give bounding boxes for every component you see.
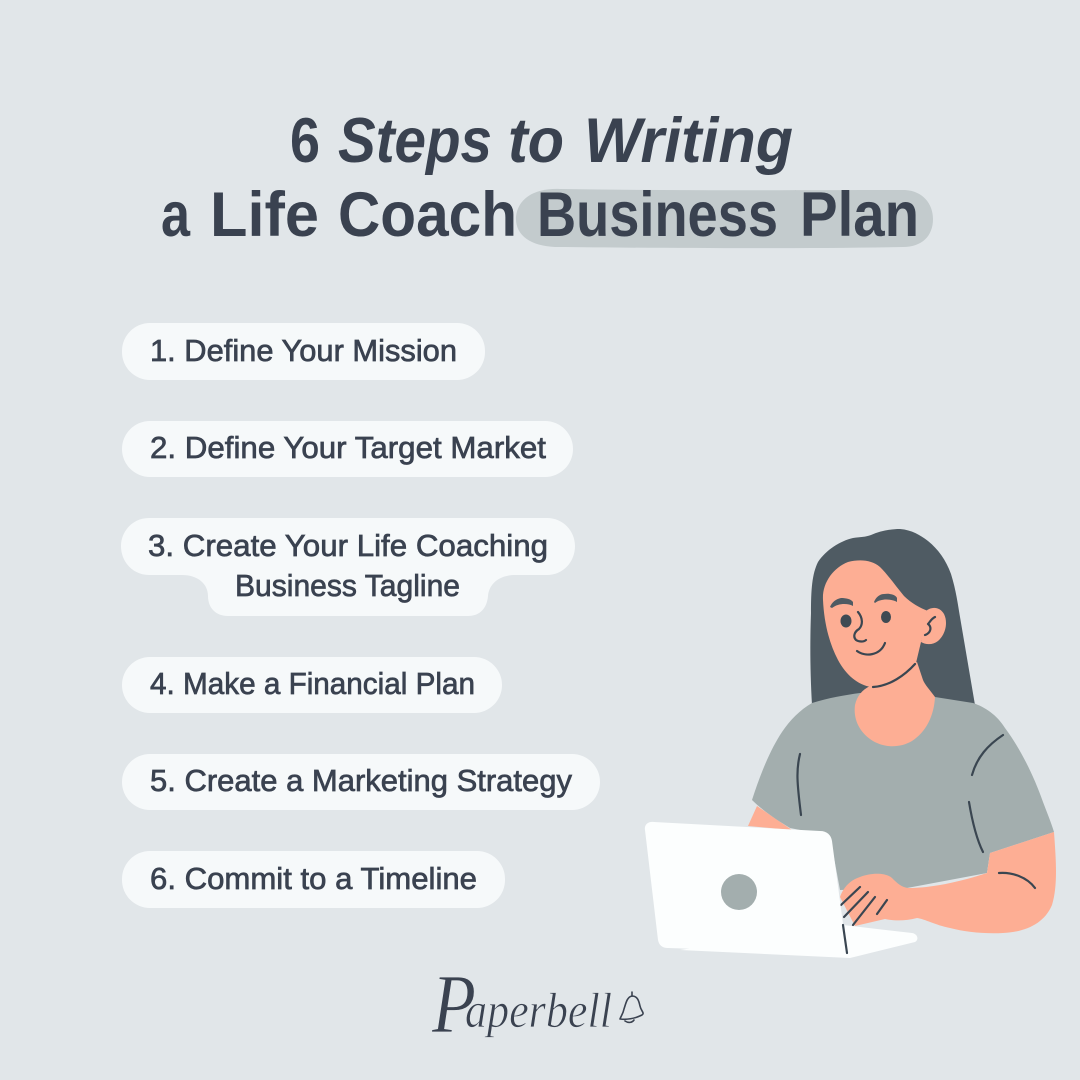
step 3: 3. Create Your Life Coaching — [148, 528, 548, 563]
hair — [810, 529, 975, 705]
title: Steps — [338, 106, 492, 176]
title: Life — [210, 180, 319, 250]
arm and finger lines — [841, 873, 1035, 925]
step 1: 1. Define Your Mission — [150, 333, 457, 368]
step 5 — [122, 754, 600, 810]
ear — [921, 608, 946, 644]
step 6 — [122, 851, 505, 908]
step 2 — [122, 421, 573, 477]
shirt — [752, 693, 1054, 890]
step 6: 6. Commit to a Timeline — [150, 861, 477, 896]
step 1 — [122, 323, 485, 380]
title: Business — [537, 180, 778, 250]
logo: Paperbell: aperbell — [465, 982, 612, 1038]
step 3 — [121, 518, 575, 616]
laptop hinge line — [843, 925, 847, 953]
title: to — [508, 106, 564, 176]
icon: bell — [620, 992, 643, 1022]
laptop base — [680, 925, 917, 958]
facial features — [830, 594, 935, 687]
laptop logo — [721, 874, 757, 910]
logo: Paperbell — [431, 958, 643, 1051]
step 4 — [122, 657, 502, 713]
illustration: woman at laptop — [645, 529, 1056, 958]
title: a — [161, 180, 191, 250]
forearm and hand — [840, 832, 1056, 933]
neck — [855, 662, 935, 746]
title: Plan — [800, 180, 919, 250]
step 3: Business Tagline — [235, 568, 460, 603]
step 5: 5. Create a Marketing Strategy — [150, 763, 572, 798]
laptop lid — [645, 822, 847, 954]
title highlight — [516, 189, 933, 248]
gap between arm and shirt — [985, 855, 993, 874]
title: Coach — [338, 180, 517, 250]
shirt creases — [797, 735, 1003, 852]
left arm — [748, 806, 792, 830]
logo: Paperbell: P — [431, 958, 476, 1051]
title: 6 — [290, 106, 320, 176]
face — [823, 560, 928, 687]
title: Writing — [584, 106, 793, 176]
step 2: 2. Define Your Target Market — [150, 430, 546, 465]
title — [161, 106, 933, 250]
step 4: 4. Make a Financial Plan — [150, 666, 475, 701]
